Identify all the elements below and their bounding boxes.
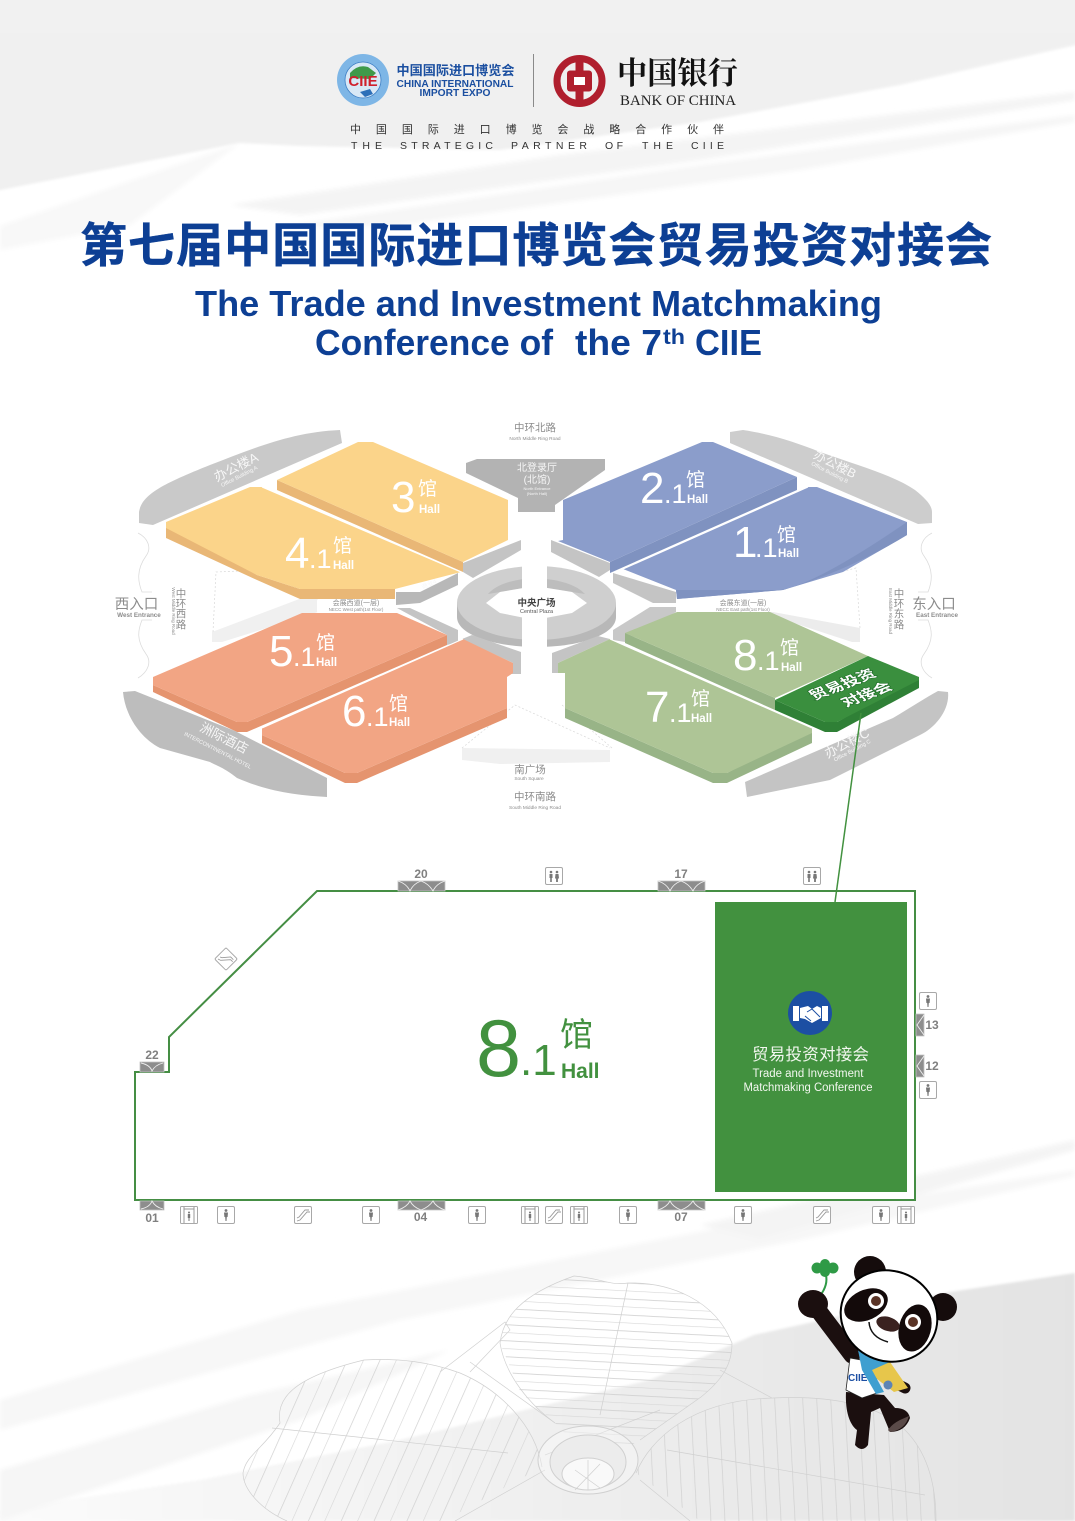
icon: side restroom upper [920,992,936,1010]
hall 4.1: 馆 [333,535,352,557]
hall 3: 馆 [418,478,437,500]
conference zone highlight: 贸易投资 [805,666,880,703]
hall title [476,1004,600,1094]
building: Office B: Office Building B [810,461,849,485]
east path label [716,598,770,612]
hall 1.1: Hall [778,548,799,560]
hall 2.1: 馆 [686,469,705,491]
body and legs [846,1392,910,1449]
building: North entrance hall: 北登录厅 [517,461,557,474]
building: Office C [745,691,948,797]
raised arm [815,1306,852,1355]
leader line [835,713,861,902]
map label: west road: 西 [176,608,186,620]
logo text: Bank of China: 中国银行 [617,48,738,93]
scarf [858,1346,908,1392]
hall title: 8 [476,1004,521,1094]
map label: east road: 路 [894,618,905,631]
map label: west entrance: 西入口 [115,597,158,613]
conference zone [715,902,907,1192]
building: InterContinental Hotel [123,691,327,797]
door 13: 13 [925,1018,939,1032]
map label: east entrance: East Entrance [916,612,958,619]
hall 2.1: 2 [640,464,664,513]
door 01 [140,1201,164,1225]
map label: west road: 路 [176,618,187,631]
hall 1.1: 馆 [777,524,796,546]
title: English: The Trade and Investment Matchmaking [195,283,882,324]
hall 3: Hall [419,504,440,516]
conference name: Matchmaking Conference [744,1082,872,1094]
map label: south road [509,790,561,811]
strategic partner text: THE [351,140,382,152]
door 13 [916,1014,939,1036]
icon: side restroom lower [920,1082,936,1098]
hall 2.1 [558,442,797,573]
hall 5.1: 5 [269,627,293,676]
shirt [846,1358,880,1398]
map label: west road: 中 [176,587,186,600]
map label: east entrance [912,596,958,619]
expo site map [115,421,958,811]
central plaza ring [457,540,616,680]
hall 8.1 floor plan [135,867,939,1225]
logo text: China International Import Expo: CHINA INTERNATIONAL [396,78,514,90]
conference zone highlight: 对接会 [837,679,896,710]
west path label [317,598,396,613]
strategic partner text: PARTNER [511,140,587,152]
icon row: bottom facilities [180,1206,914,1224]
clover [812,1259,838,1277]
map label: central plaza: 中央广场 [517,597,556,609]
hall 5.1: 馆 [316,632,335,654]
mascot: panda: CIIE [848,1373,868,1384]
right arm [885,1378,905,1388]
strategic partner text: STRATEGIC [400,140,493,152]
building: Office A: Office Building A [220,465,259,489]
building: Office B: 办公楼B [811,447,859,481]
map label: east road: 中 [894,587,904,600]
hall 1.1: 1 [733,518,757,567]
door 17 [658,867,705,891]
logo text: China International Import Expo: 中国国际进口博览会 [396,63,514,78]
hall 5.1 [153,613,447,732]
map label: south square: 南广场 [514,763,546,776]
map label: central plaza [517,597,556,615]
map label: west road: West Middle Ring Road [171,587,176,635]
conference zone highlight [775,656,919,732]
building: Office C: 办公楼C [822,725,872,761]
strategic partner text: 中国国际进口博览会战略合作伙伴 [350,122,724,136]
icon: restroom top left [546,868,562,884]
eyes [839,1282,893,1328]
hall 4.1: .1 [309,544,332,574]
map label: west road: 环 [176,598,186,610]
map label: east road: 环 [894,598,904,610]
hall 2.1: Hall [687,494,708,506]
door 07 [658,1201,705,1224]
hall 8.1: 8 [733,631,757,680]
strategic partner text: THE [642,140,673,152]
hall title: Hall [561,1060,600,1083]
map label: central plaza: Central Plaza [520,609,554,615]
west path label: 会展西道(一层) [333,598,379,607]
hall 7.1: 7 [645,683,669,732]
hall 4.1 [166,487,461,599]
building: North entrance hall: (北馆) [524,473,550,486]
map label: east road: East Middle Ring Road [888,588,893,635]
hall 8.1 [625,612,868,710]
hall title: 馆 [560,1016,593,1053]
map label: north road: North Middle Ring Road [509,436,561,442]
building: Office A: 办公楼A [211,449,261,484]
hall 6.1 [262,639,513,783]
hall 3: 3 [391,473,415,522]
hall 4.1: 4 [285,529,309,578]
gray connector blocks: 商业4 [421,577,438,591]
door 17: 17 [674,867,688,881]
mascot: panda [798,1255,957,1449]
east path label: 会展东道(一层) [720,598,766,607]
door 22: 22 [145,1048,159,1062]
hall 7.1: Hall [691,713,712,725]
strategic partner text [350,122,724,152]
map label: south road: South Middle Ring Road [509,805,561,811]
nose and mouth [874,1314,902,1334]
door 22 [140,1048,164,1072]
ears [854,1256,886,1288]
door 04 [398,1201,445,1224]
conference name: 贸易投资对接会 [752,1045,869,1064]
hall 2.1: .1 [664,479,687,509]
map label: west entrance: West Entrance [117,612,161,619]
hall 5.1: .1 [293,642,316,672]
map label: east entrance: 东入口 [912,596,956,613]
building: Office A [139,430,342,525]
conference name: Trade and Investment [752,1068,864,1080]
hall 7.1: .1 [669,698,692,728]
door 01: 01 [145,1211,159,1225]
building: North entrance hall: (North Hall) [527,491,548,496]
east path label: NECC East path(1st Floor) [716,607,770,612]
hall 5.1: Hall [316,657,337,669]
building: InterContinental Hotel: INTERCONTINENTAL HOTEL [183,732,252,771]
hall 7.1: 馆 [691,688,710,710]
icon: escalator diagonal [215,948,237,970]
map label: south square: South Square [514,776,544,782]
door 12 [916,1055,939,1077]
map label: north road [509,421,561,442]
door 12: 12 [925,1059,939,1073]
door 04: 04 [414,1210,427,1224]
hall 1.1: .1 [755,533,778,563]
strategic partner text: CIIE [691,140,724,152]
map label: south road: 中环南路 [514,790,556,803]
title: English [195,283,882,363]
building: InterContinental Hotel: 洲际酒店 [197,720,251,756]
hall 6.1: 馆 [389,693,408,715]
building: Office C: Office Building C [833,739,872,763]
hall 1.1 [623,487,907,599]
illustration: expo building line drawing [240,1270,940,1521]
map label: east road: 东 [894,607,904,620]
map label: east road [888,587,905,635]
title: English: CIIE [695,322,762,363]
hall 8.1: .1 [757,646,780,676]
icon: restroom top right [804,868,820,884]
hall 4.1: Hall [333,560,354,572]
hall 3 [277,442,508,572]
map label: north road: 中环北路 [514,421,556,434]
gray connector blocks [396,540,676,674]
hall 7.1 [558,639,812,783]
surrounding roads and ramps [138,533,932,764]
hall 8.1: Hall [781,662,802,674]
map label: west road [171,587,187,635]
conference name [744,1045,872,1094]
logo: Bank of China emblem [557,56,602,106]
hall 6.1: Hall [389,717,410,729]
head [826,1255,952,1377]
title: Chinese: 第七届中国国际进口博览会贸易投资对接会 [80,219,992,272]
map label: south square [514,763,546,782]
west path label: NECC West path(1st Floor) [329,607,384,612]
building: North entrance hall [466,459,605,512]
hall 6.1: 6 [342,687,366,736]
hall 8.1: 馆 [780,637,799,659]
title: English: th [663,326,685,349]
title: English: Conference of [315,322,554,363]
door 07: 07 [674,1210,688,1224]
divider between logos [533,54,534,107]
icon: handshake [788,991,832,1035]
door 20 [398,867,445,891]
map label: west entrance [115,597,161,619]
hall 6.1: .1 [366,702,389,732]
door 20: 20 [414,867,428,881]
logo text: China International Import Expo: IMPORT EXPO [420,87,490,99]
title: English: the 7 [575,322,662,363]
logo text: Bank of China: BANK OF CHINA [620,93,737,109]
logo: CIIE emblem: CIIE [348,73,378,90]
strategic partner text: OF [605,140,623,152]
building: North entrance hall: North Entrance [524,486,551,491]
logo text: China International Import Expo [396,63,514,99]
hall title: .1 [520,1036,557,1085]
logo: CIIE emblem [337,54,389,106]
building: Office B [730,430,932,524]
